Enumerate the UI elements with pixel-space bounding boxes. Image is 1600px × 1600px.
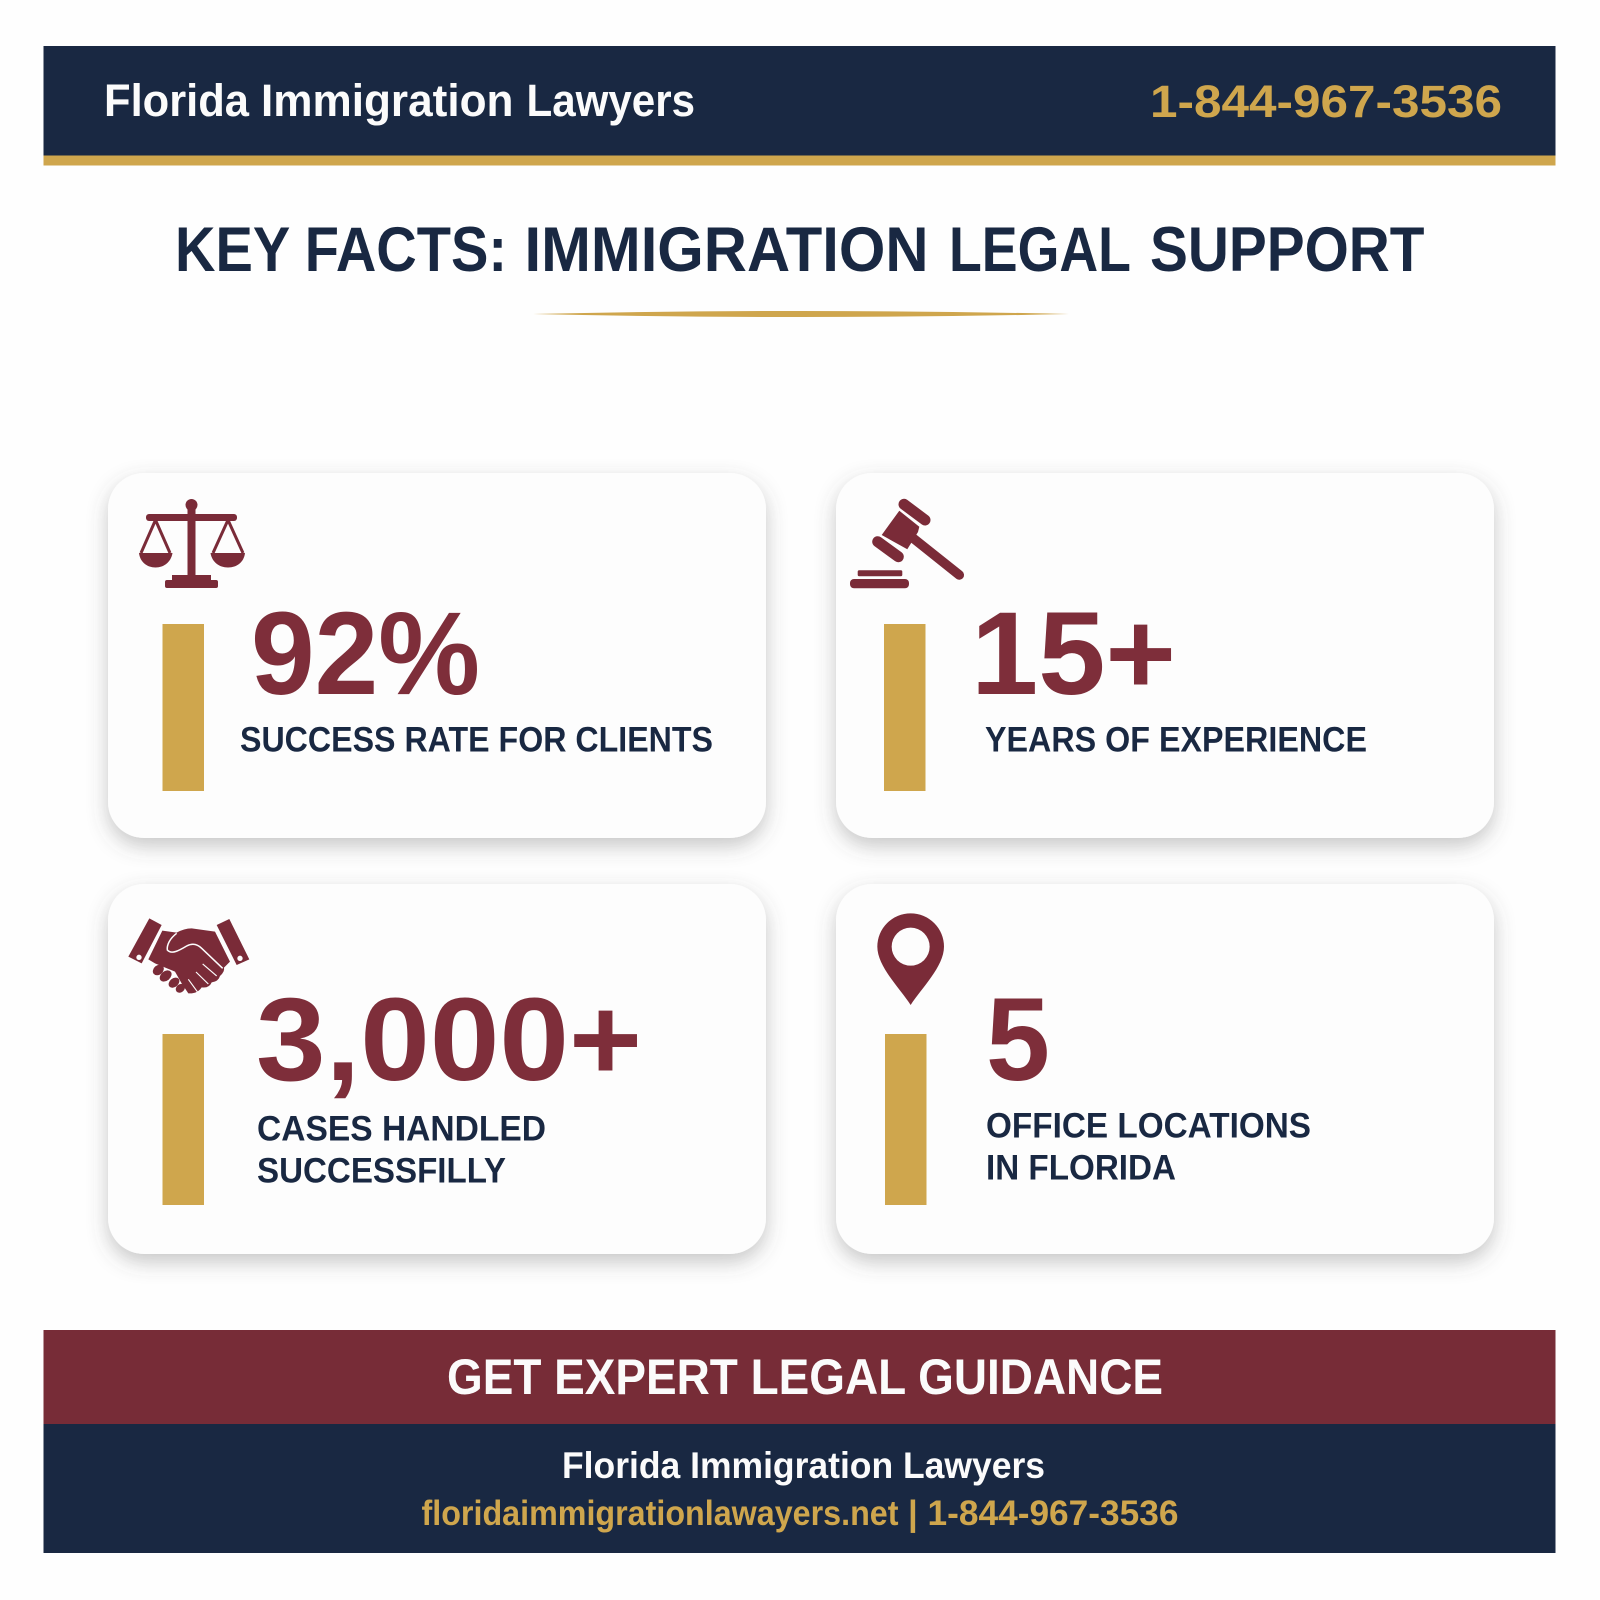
- footer contact line: floridaimmigrationlawayers.net: [422, 1494, 899, 1533]
- statistic: 92%: 92%: [251, 588, 480, 720]
- call-to-action banner: [44, 1330, 1556, 1424]
- statistic: 3,000+: 3,000+: [256, 974, 642, 1106]
- gold bar: [162, 624, 204, 791]
- header banner: [44, 46, 1556, 166]
- panel: years of experience: [836, 473, 1494, 838]
- label: CASES HANDLED: [257, 1110, 546, 1148]
- icon: map pin: [877, 913, 944, 1005]
- label: SUCCESSFILLY: [257, 1152, 506, 1190]
- firm name: Immigration: [261, 75, 514, 126]
- gold bar: [884, 624, 926, 791]
- firm name: Lawyers: [526, 75, 695, 126]
- statistic: 15+: 15+: [971, 588, 1176, 720]
- icon: scales of justice: [139, 499, 245, 588]
- icon: gavel: [850, 504, 959, 588]
- label: SUCCESS RATE FOR CLIENTS: [240, 720, 713, 760]
- call-to-action heading: GET EXPERT LEGAL GUIDANCE: [447, 1349, 1163, 1405]
- firm name: [104, 75, 695, 126]
- label: IN FLORIDA: [986, 1148, 1176, 1188]
- icon: handshake: [128, 918, 249, 995]
- footer contact line: [422, 1494, 1178, 1533]
- footer contact line: |: [908, 1494, 918, 1533]
- footer firm name: Florida Immigration Lawyers: [562, 1445, 1045, 1486]
- statistic: 5: 5: [986, 974, 1050, 1106]
- title: KEY FACTS:: [175, 215, 507, 285]
- title: SUPPORT: [1150, 215, 1424, 285]
- title: LEGAL: [949, 215, 1131, 285]
- label: [986, 1106, 1311, 1188]
- label: YEARS OF EXPERIENCE: [985, 720, 1367, 760]
- label: OFFICE LOCATIONS: [986, 1106, 1311, 1146]
- title: [175, 215, 1424, 285]
- footer contact line: 1-844-967-3536: [928, 1494, 1178, 1533]
- gold bar: [885, 1034, 926, 1205]
- firm name: Florida: [104, 75, 250, 126]
- gold bar: [162, 1034, 204, 1205]
- label: [257, 1110, 546, 1190]
- title underline: [533, 311, 1069, 317]
- panel: office locations: [836, 884, 1494, 1254]
- panel: cases handled: [108, 884, 766, 1254]
- footer banner: [44, 1424, 1556, 1553]
- panel: success rate: [108, 473, 766, 838]
- title: IMMIGRATION: [524, 215, 928, 285]
- phone number: 1-844-967-3536: [1150, 76, 1502, 127]
